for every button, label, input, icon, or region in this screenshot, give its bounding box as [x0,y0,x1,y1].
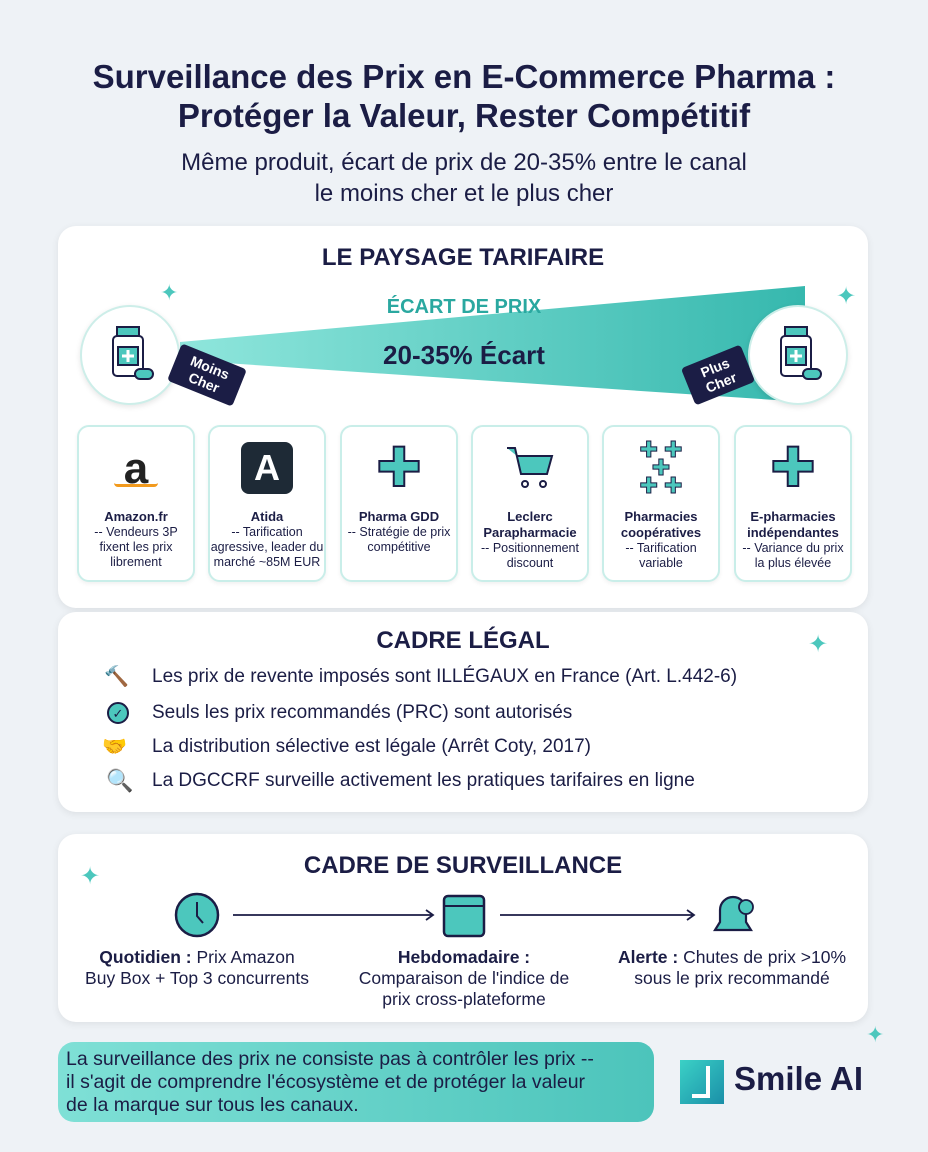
card: amazon [77,425,195,582]
list item 1: Les prix de revente imposés sont ILLÉGAUX en France (Art. L.442-6) [152,666,737,687]
card: atida: -- Tarification agressive, leader du marché ~85M EUR [211,525,323,569]
step: quotidien: Quotidien : Prix Amazon [99,947,295,967]
sparkles: ✦ [160,280,178,305]
card: cooperatives: -- Tarification variable [625,541,697,570]
step: alerte: sous le prix recommandé [634,968,830,988]
title: Surveillance des Prix en E-Commerce Pharma : [93,58,835,95]
logo: Smile AI: Smile AI [734,1060,863,1097]
text: 🔨 [104,666,129,688]
text: ✓ [113,706,123,721]
step: alerte [618,947,846,988]
step: hebdomadaire: prix cross-plateforme [382,989,546,1009]
card: pharma gdd: -- Stratégie de prix compétitive [348,525,450,554]
icon: left bottle [80,305,180,405]
card: cooperatives [602,425,720,582]
card: cooperatives: Pharmacies coopératives [621,509,701,540]
card: amazon: a [124,444,148,493]
title: Protéger la Valeur, Rester Compétitif [178,97,750,134]
tag: plus cher: Plus [698,355,732,381]
subtitle: le moins cher et le plus cher [315,180,613,207]
card: amazon: -- Vendeurs 3P fixent les prix librement [94,525,178,569]
card: pharma gdd: ✚ [376,438,422,498]
label: ecart de prix: ÉCART DE PRIX [387,296,541,318]
card: cooperatives: ✚ [652,455,670,480]
subtitle [181,149,747,207]
step: hebdomadaire [359,947,569,1009]
step: hebdomadaire: Comparaison de l'indice de [359,968,569,988]
text: ✦ [866,1022,884,1047]
card: e-pharmacies: -- Variance du prix la plus élevée [742,541,844,570]
list item 3: La distribution sélective est légale (Arrêt Coty, 2017) [152,736,591,757]
icon: right bottle [748,305,848,405]
panel: cadre legal [58,612,868,812]
card: leclerc: Leclerc Parapharmacie [483,509,577,540]
card: e-pharmacies: ✚ [770,438,816,498]
card: atida: Atida [251,509,283,524]
text: ✦ [808,631,828,658]
callout: il s'agit de comprendre l'écosystème et de protéger la valeur [66,1071,585,1093]
tag: plus cher [681,344,755,406]
card: e-pharmacies: E-pharmacies indépendantes [747,509,839,540]
label: 20-35%: 20-35% Écart [383,340,545,370]
heading: CADRE DE SURVEILLANCE [304,852,622,879]
card: pharma gdd [340,425,458,582]
text: ✦ [80,863,100,890]
panel: paysage tarifaire [58,226,868,608]
step: hebdomadaire: Hebdomadaire : [398,947,530,967]
callout: La surveillance des prix ne consiste pas à contrôler les prix -- [66,1048,594,1070]
gap wedge [180,286,805,400]
card: cooperatives: ✚ ✚ [640,437,682,462]
logo: Smile AI [680,1060,863,1104]
subtitle: Même produit, écart de prix de 20-35% entre le canal [181,149,747,176]
callout [58,1042,654,1122]
text: ✦ [836,283,856,310]
heading: LE PAYSAGE TARIFAIRE [322,244,604,271]
timeline icons and arrows [174,892,754,938]
step: alerte: Alerte : Chutes de prix >10% [618,947,846,967]
callout: de la marque sur tous les canaux. [66,1094,359,1116]
tag: moins cher: Moins [188,353,232,383]
list item 2: Seuls les prix recommandés (PRC) sont autorisés [152,702,572,723]
card: e-pharmacies [734,425,852,582]
text: 🔍 [106,768,133,793]
heading: CADRE LÉGAL [376,627,550,654]
list item 4: La DGCCRF surveille activement les pratiques tarifaires en ligne [152,770,695,791]
card: atida: A [254,447,280,488]
title [93,58,835,134]
step: quotidien: Buy Box + Top 3 concurrents [85,968,309,988]
card: amazon: Amazon.fr [104,509,168,524]
card: pharma gdd: Pharma GDD [359,509,439,524]
panel: cadre de surveillance [58,834,868,1022]
step: quotidien [85,947,309,988]
tag: plus cher: Cher [703,369,739,396]
card: cooperatives: ✚ ✚ [640,473,682,498]
card: atida [208,425,326,582]
tag: moins cher [167,343,247,407]
tag: moins cher: Cher [186,369,222,396]
text: 🤝 [102,736,127,758]
card: leclerc [471,425,589,582]
card: leclerc: -- Positionnement discount [481,541,579,570]
